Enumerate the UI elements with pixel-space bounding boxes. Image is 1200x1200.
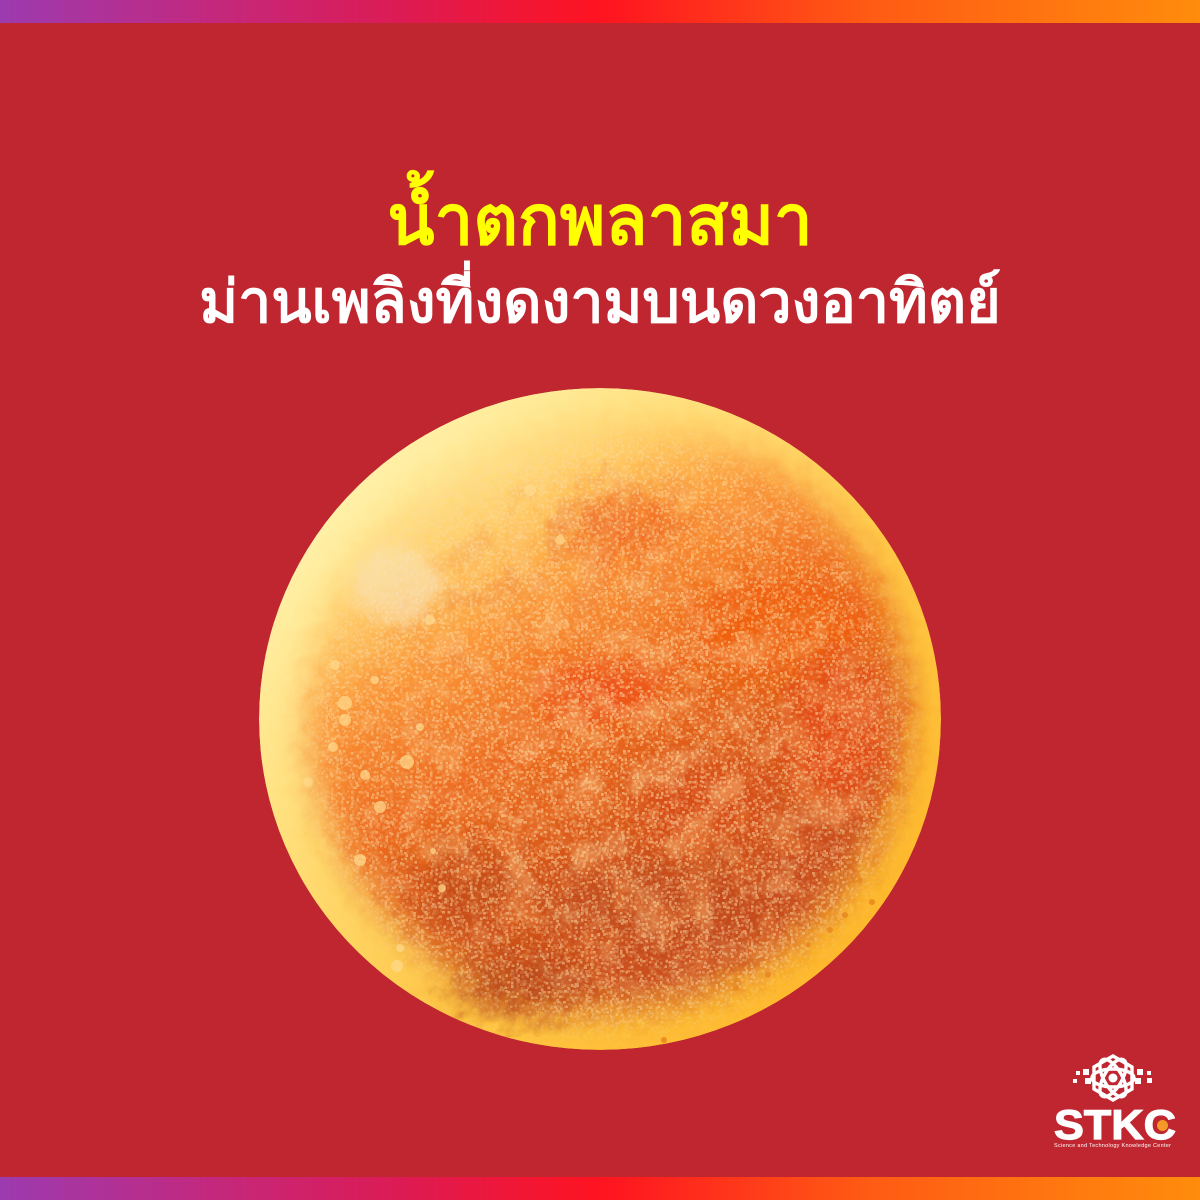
illustration: watercolor sun	[259, 388, 941, 1050]
sun orange body	[308, 416, 904, 1008]
pale highlight patch	[354, 547, 442, 623]
logo icon: atom	[1073, 1054, 1152, 1102]
logo orange dot	[1157, 1120, 1168, 1131]
top gradient bar	[0, 0, 1200, 23]
deep tone patches	[410, 494, 890, 1011]
pale droplets	[303, 484, 565, 972]
logo: STKC	[1054, 1054, 1176, 1149]
pale mottled texture	[356, 472, 884, 1007]
title: น้ำตกพลาสมา	[387, 182, 813, 259]
bottom gradient bar	[0, 1177, 1200, 1200]
sun golden rim base	[259, 388, 941, 1050]
logo tagline: Science and Technology Knowledge Center	[1054, 1143, 1171, 1149]
darker droplets on rim	[661, 878, 875, 1043]
speckled texture	[303, 425, 924, 1044]
subtitle: ม่านเพลิงที่งดงามบนดวงอาทิตย์	[199, 269, 1001, 335]
red mottled texture	[410, 485, 888, 982]
